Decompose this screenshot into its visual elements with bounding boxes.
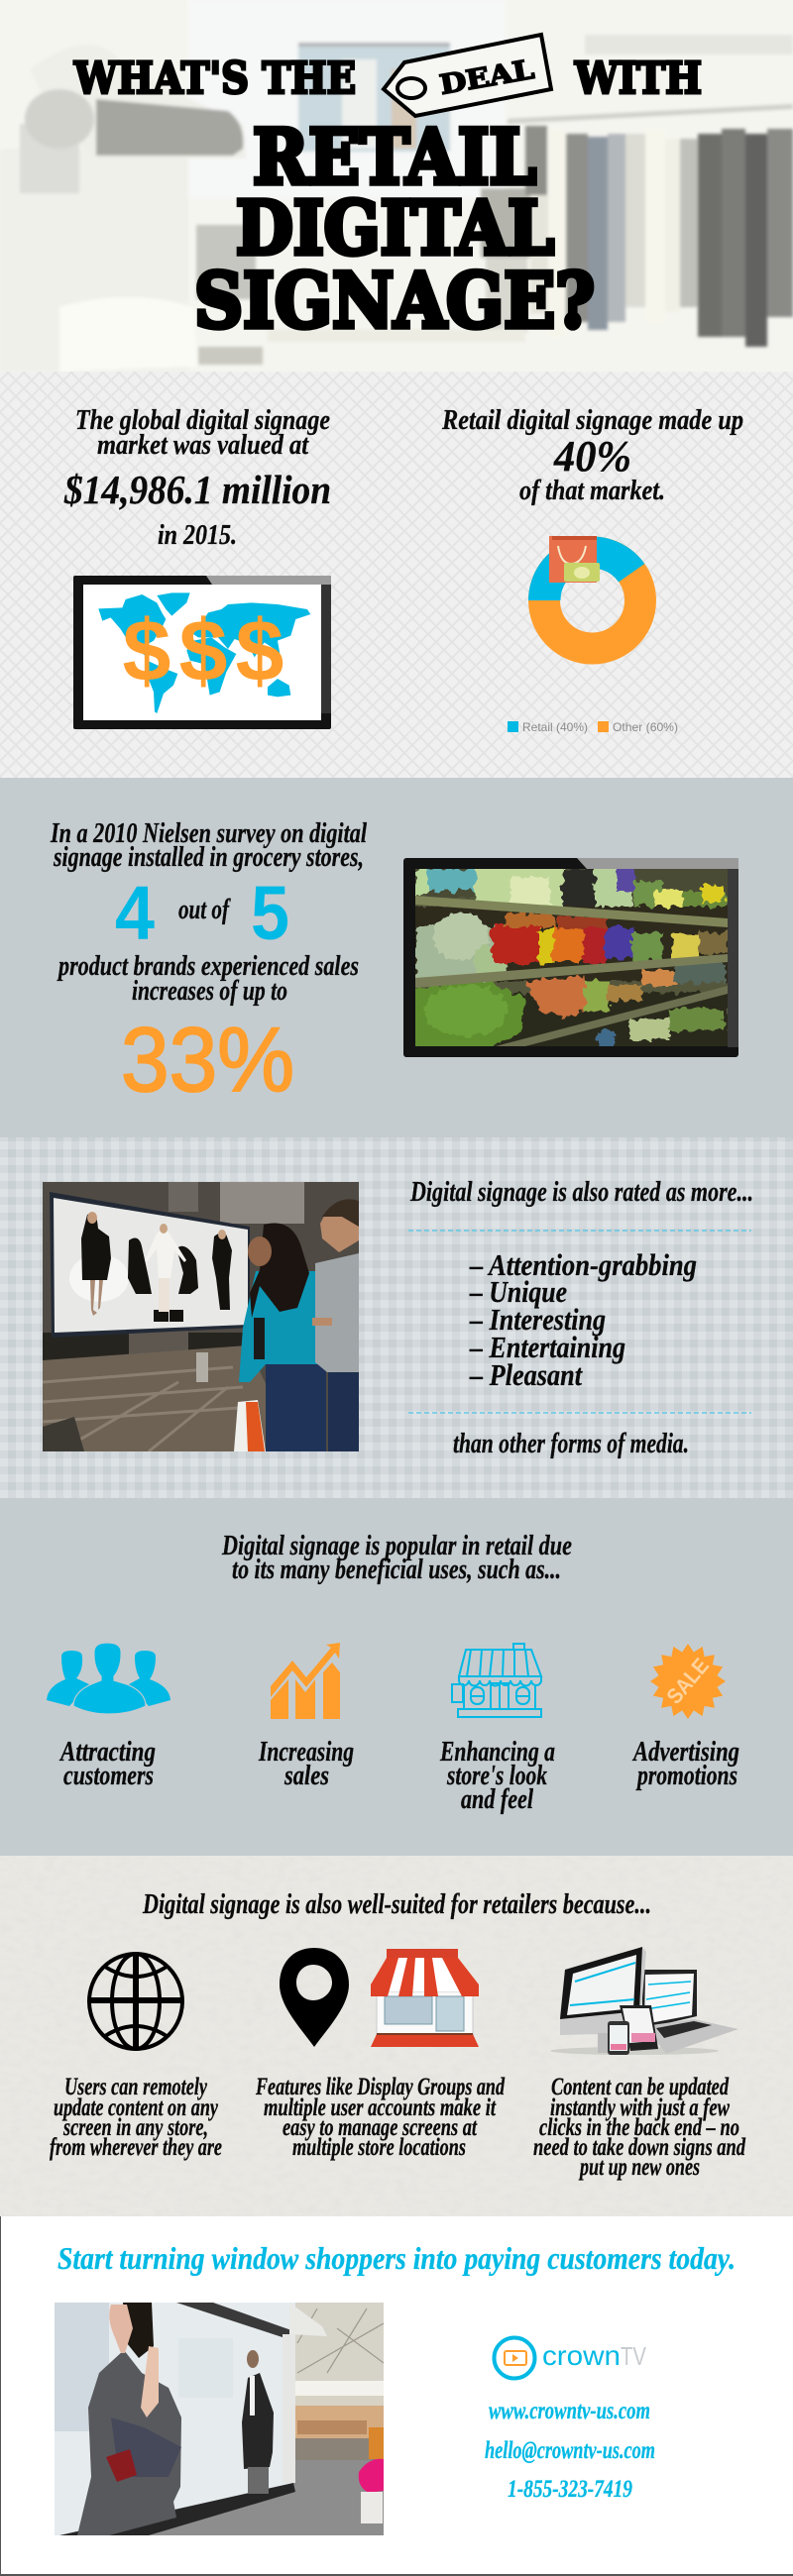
retail share text [441, 404, 743, 506]
label: advertising promotions [631, 1737, 739, 1791]
4 out of 5 statistic: 4 [115, 871, 155, 956]
shoppers [266, 1364, 326, 1451]
title line: digital: DIGITAL [236, 186, 554, 271]
text: users can update remotely [50, 2074, 222, 2161]
icon: rising sales chart [271, 1643, 340, 1719]
retail share text: of that market. [519, 475, 665, 506]
uses heading [221, 1530, 572, 1585]
text: display groups and user accounts: Features like Display Groups and [255, 2074, 505, 2100]
label: attracting customers [58, 1737, 156, 1791]
man figure on the video wall [242, 2350, 274, 2494]
panel: market value [0, 372, 793, 778]
icon: map pin [280, 1948, 349, 2047]
uses heading: Digital signage is popular in retail due [221, 1530, 572, 1561]
list of qualities: – Entertaining [469, 1330, 625, 1364]
list of qualities: – Attention-grabbing [469, 1247, 697, 1282]
uses heading: to its many beneficial uses, such as... [232, 1554, 561, 1585]
text: content updated instantly: instantly with just a few [550, 2094, 730, 2121]
survey intro text: In a 2010 Nielsen survey on digital [50, 817, 368, 849]
dollar signs: $ [179, 601, 227, 699]
retail share text: 40% [553, 432, 631, 481]
tablet with grocery shelves photo [403, 858, 738, 1057]
header section with store photo and title [0, 0, 793, 372]
screen figures [81, 1214, 232, 1322]
photo: video wall in airport [55, 2303, 384, 2535]
text: users can update remotely: update content on any [54, 2094, 219, 2121]
icon: group of people [47, 1643, 170, 1714]
text: content updated instantly: put up new ones [579, 2154, 700, 2181]
label: advertising promotions: promotions [635, 1761, 737, 1791]
donut chart [528, 536, 644, 648]
text: users can update remotely: from wherever they are [50, 2134, 222, 2161]
label: increasing sales: Increasing [258, 1737, 354, 1768]
retail share text: Retail digital signage made up [441, 404, 743, 436]
dollar signs [123, 601, 283, 699]
text: users can update remotely: Users can remotely [64, 2074, 208, 2100]
market value text: market was valued at [97, 429, 309, 461]
text: display groups and user accounts: easy to manage screens at [283, 2114, 478, 2141]
dollar signs: $ [236, 601, 283, 699]
icon: globe [89, 1954, 182, 2049]
chart legend [508, 720, 678, 734]
label: increasing sales [258, 1737, 354, 1791]
label: enhancing a store's look and feel: and feel [461, 1784, 533, 1815]
contact details [485, 2398, 655, 2503]
label: enhancing a store's look and feel: store's look [446, 1761, 547, 1791]
label: attracting customers: customers [63, 1761, 154, 1791]
crowntv logo: crown [542, 2340, 621, 2371]
contact details: www.crowntv-us.com [489, 2398, 650, 2424]
photo: shoppers looking at digital sign [43, 1182, 359, 1451]
list of qualities: – Interesting [469, 1302, 606, 1337]
list of qualities: – Pleasant [469, 1357, 583, 1392]
survey intro text: signage installed in grocery stores, [53, 841, 364, 873]
panel: call to action and contact [0, 2216, 793, 2576]
title line: with: WITH [574, 54, 702, 104]
text: users can update remotely: screen in any store, [62, 2114, 208, 2141]
title line: retail: RETAIL [253, 113, 536, 201]
chart legend: Other (60%) [613, 720, 678, 734]
market value text: $14,986.1 million [63, 467, 331, 512]
text: display groups and user accounts [255, 2074, 505, 2161]
icon: shopping bag [549, 536, 600, 583]
panel: rated as more [0, 1137, 793, 1498]
text: content updated instantly [533, 2074, 745, 2181]
contact details: hello@crowntv-us.com [485, 2437, 655, 2464]
market value text [63, 404, 331, 551]
icon: red awning store [371, 1949, 479, 2047]
survey follow-up text: increases of up to [132, 975, 287, 1007]
4 out of 5 statistic: out of [178, 894, 231, 925]
text: display groups and user accounts: multiple store locations [292, 2134, 466, 2161]
list of qualities [469, 1247, 697, 1392]
title line: signage: SIGNAGE? [194, 257, 595, 345]
contact details: 1-855-323-7419 [508, 2476, 632, 2503]
4 out of 5 statistic [115, 871, 289, 956]
market value text: in 2015. [158, 519, 237, 551]
icon: monitor, laptop, tablet and phone [550, 1947, 738, 2055]
survey intro text [50, 817, 368, 873]
survey follow-up text: product brands experienced sales [57, 950, 359, 982]
label: increasing sales: sales [283, 1761, 329, 1791]
crowntv logo: TV [621, 2341, 647, 2371]
label: enhancing a store's look and feel: Enhancing a [439, 1737, 555, 1768]
panel: beneficial uses [0, 1498, 793, 1856]
price tag with the word deal: DEAL [437, 54, 536, 101]
large woman figure on the video wall [77, 2303, 181, 2535]
label: advertising promotions: Advertising [631, 1737, 739, 1768]
panel: nielsen survey [0, 778, 793, 1137]
market value text: The global digital signage [75, 404, 330, 436]
list of qualities: – Unique [469, 1274, 567, 1309]
icon: world map [98, 592, 310, 713]
survey follow-up text [57, 950, 359, 1007]
text: display groups and user accounts: multiple user accounts make it [264, 2094, 497, 2121]
panel: well-suited for retailers [0, 1856, 793, 2216]
tablet with world map and dollar signs [73, 576, 331, 729]
title line: what's the: WHAT'S THE [73, 54, 356, 104]
label: attracting customers: Attracting [58, 1737, 156, 1768]
crowntv logo [494, 2338, 647, 2378]
price tag with the word deal [384, 35, 551, 116]
4 out of 5 statistic: 5 [251, 871, 289, 956]
33 percent statistic: 33% [121, 1010, 294, 1111]
text: content updated instantly: Content can be updated [551, 2074, 729, 2100]
icon: sale starburst [650, 1644, 726, 1719]
than other forms of media text: than other forms of media. [453, 1428, 689, 1459]
icon: sale starburst: SALE [661, 1654, 714, 1709]
dollar signs: $ [123, 601, 170, 699]
header background photo [0, 0, 793, 372]
retailers heading: Digital signage is also well-suited for retailers because... [142, 1888, 651, 1920]
chart legend: Retail (40%) [522, 720, 588, 734]
icon: storefront outline [452, 1644, 541, 1717]
label: enhancing a store's look and feel [439, 1737, 555, 1815]
